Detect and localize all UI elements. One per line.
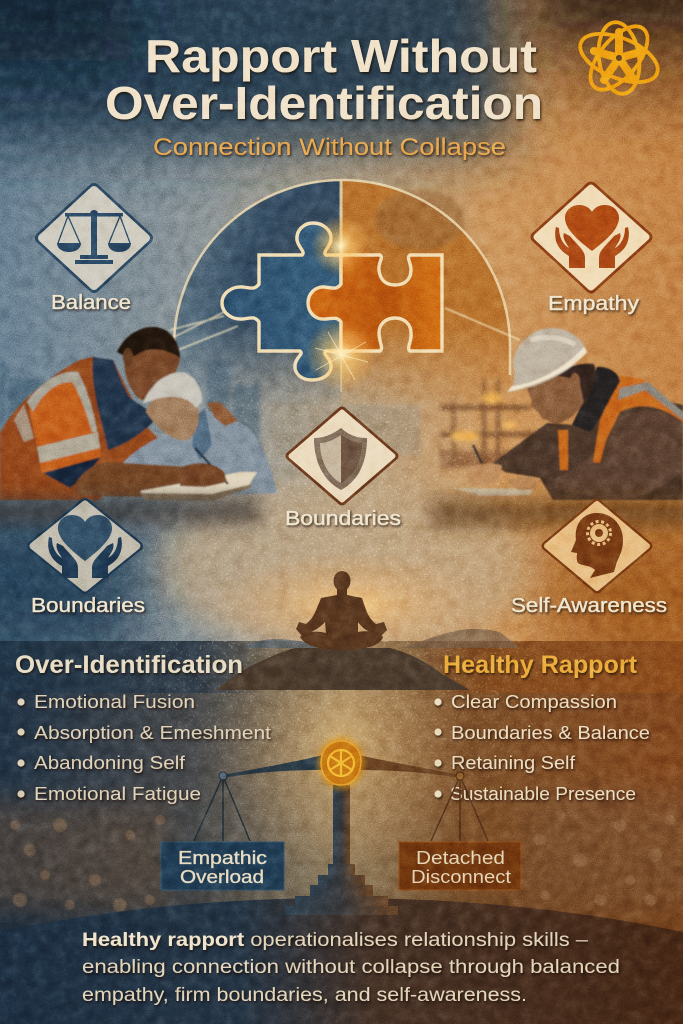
worker head (124, 334, 180, 400)
balance scale (161, 736, 521, 915)
bullet list (434, 692, 650, 804)
notebook (140, 472, 257, 498)
pan label: empathic overload: Empathic (178, 848, 267, 868)
orange sleeve (28, 382, 97, 447)
bullet list: Emotional Fatigue (34, 784, 201, 804)
pan label: empathic overload (161, 842, 284, 890)
pan label: detached disconnect: Detached (416, 848, 505, 868)
heading: Healthy Rapport (443, 651, 638, 679)
icon: empathy diamond (536, 187, 647, 288)
label: boundaries left: Boundaries (31, 595, 145, 617)
bullet list (17, 692, 271, 804)
pan label: empathic overload: Overload (180, 867, 264, 887)
puzzle: orange piece (308, 255, 442, 351)
icon: orbit logo (573, 17, 665, 99)
dark collar (572, 367, 620, 432)
elderly head (146, 395, 199, 440)
heading: Over-Identification (15, 651, 243, 679)
navy collar and shirt (93, 357, 156, 450)
jacket (493, 385, 683, 500)
bullet list: Abandoning Self (34, 753, 186, 773)
worker torso (0, 357, 160, 500)
figure: worker comforting elderly person (0, 327, 277, 501)
reflective shoulder strap (27, 372, 97, 432)
elderly body (123, 410, 277, 495)
summary text (82, 930, 620, 1006)
meditator body (296, 588, 387, 650)
summary text: enabling connection without collapse through balanced (82, 957, 620, 978)
title: Over-Identification (105, 77, 543, 129)
bullet list: Clear Compassion (451, 692, 617, 712)
bullet list: Emotional Fusion (34, 692, 195, 712)
title: Rapport Without (145, 30, 537, 82)
hand on shoulder (207, 402, 238, 426)
panel: over-identification list (15, 651, 271, 804)
label: empathy: Empathy (548, 293, 639, 315)
figure: worker with helmet writing (455, 328, 683, 500)
icon: shield diamond (290, 411, 394, 501)
meditator head (334, 571, 350, 591)
beam and strings (223, 755, 323, 778)
hard hat (507, 328, 587, 392)
face (527, 370, 588, 424)
icon: self-awareness diamond (546, 503, 648, 589)
ground haze under the figures (0, 498, 683, 526)
arch behind puzzle (174, 180, 510, 405)
panel: lower comparison background (0, 615, 683, 1024)
label: self-awareness: Self-Awareness (511, 595, 667, 617)
icon: balance diamond (41, 189, 147, 287)
medallion (317, 736, 365, 790)
background: blurred industrial site (0, 360, 540, 468)
icon: boundaries diamond left (32, 503, 138, 589)
post and tiered base (333, 785, 350, 865)
bullet list: Absorption & Emeshment (34, 723, 271, 743)
bullet list: Boundaries & Balance (451, 723, 650, 743)
subtitle: Connection Without Collapse (153, 134, 506, 161)
summary text: Healthy rapport operationalises relationship skills – (82, 930, 588, 951)
bullet list: Retaining Self (451, 753, 576, 773)
label: boundaries centre: Boundaries (285, 508, 401, 530)
panel: healthy rapport list (434, 651, 650, 804)
sleeve bands (37, 432, 100, 463)
hi-vis vest (593, 376, 683, 463)
figure: meditating person on rock (215, 571, 520, 690)
light rays (170, 308, 520, 350)
pan label: detached disconnect: Disconnect (411, 867, 511, 887)
bullet list: Sustainable Presence (450, 784, 636, 804)
pan label: detached disconnect (399, 842, 521, 890)
label: balance: Balance (51, 292, 131, 314)
puzzle: blue piece (222, 223, 341, 380)
summary text: empathy, firm boundaries, and self-awareness. (82, 985, 527, 1006)
pen and writing hand (195, 448, 228, 484)
texture: light speckle behind content (90, 308, 610, 844)
footer ground panel (0, 898, 683, 1024)
puzzle sparks (305, 216, 377, 392)
forearm (76, 462, 228, 497)
title (105, 30, 543, 129)
pen, hands and clipboard (455, 488, 533, 496)
